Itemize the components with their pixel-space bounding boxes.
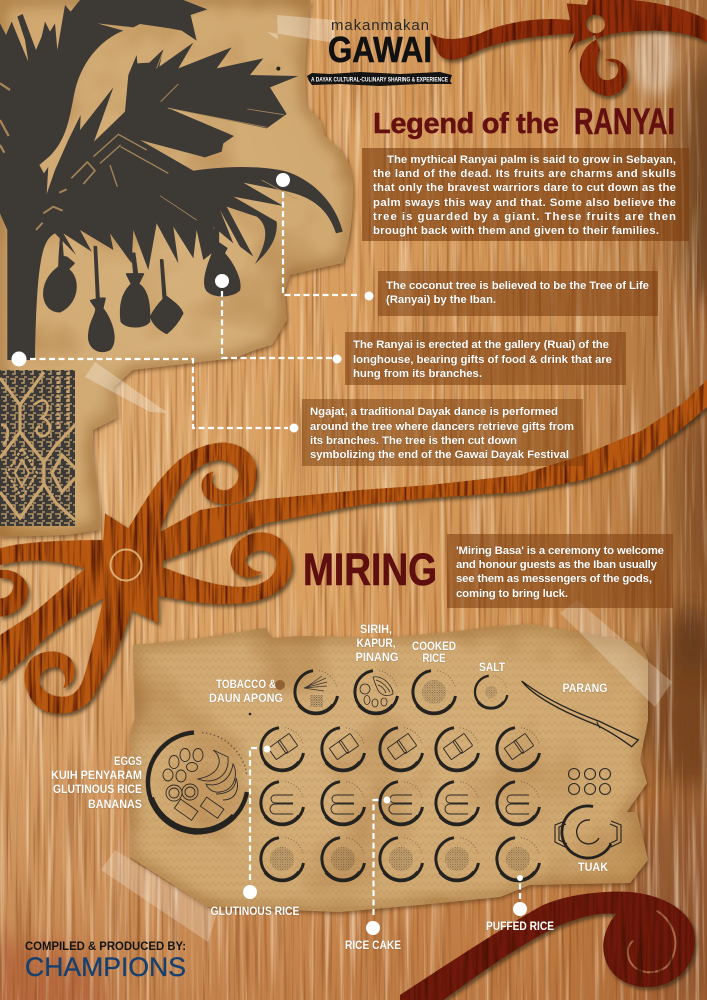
text panel: ranyai myth: brought back with them and given to their families. [373, 225, 659, 237]
parchment: miring offering layout [125, 620, 655, 920]
knot centre ring [110, 550, 142, 580]
ribbon: bottom right spiral [400, 892, 695, 1000]
ranyai palm silhouette [0, 0, 343, 360]
plate: sirih kapur pinang [355, 671, 398, 713]
label: puffed rice: PUFFED RICE [486, 921, 554, 933]
text panel: ngajat [302, 399, 583, 466]
label: offerings on large plate [51, 756, 142, 811]
text panel: ruai [345, 332, 626, 385]
plate: cooked rice [413, 671, 456, 713]
heading: legend of the ranyai [373, 101, 675, 142]
dashed callouts: miring [243, 746, 527, 935]
plates: glutinous rice row [261, 782, 540, 824]
tuak jar [555, 806, 621, 858]
large plate: eggs, kuih, glutinous rice, bananas [148, 732, 247, 832]
label: offerings on large plate: KUIH PENYARAM [51, 770, 142, 782]
label: cooked rice [412, 641, 456, 665]
text panel: ruai: The Ranyai is erected at the gallery (Ruai) of the [353, 339, 609, 351]
text panel: ranyai myth: The mythical Ranyai palm is said to grow in Sebayan, [387, 154, 676, 166]
text panel: ngajat: symbolizing the end of the Gawai Dayak Festival [310, 449, 569, 461]
logo: makanmakan gawai: makanmakan [331, 17, 429, 34]
label: tobacco and daun apong: TOBACCO & [216, 679, 276, 691]
text panel: ngajat: its branches. The tree is then cut down [310, 435, 517, 447]
label: parang: PARANG [562, 683, 608, 695]
ribbon: top right miring motif [430, 0, 707, 96]
label: sirih kapur pinang: PINANG [356, 652, 399, 664]
plate: tobacco and daun apong [295, 671, 338, 713]
parchment: top left [0, 0, 353, 537]
text panel: coconut tree: (Ranyai) by the Iban. [386, 294, 496, 306]
text panel: ranyai myth: that only the bravest warriors dare to cut down as the [373, 182, 676, 194]
heading: miring: MIRING [303, 544, 437, 595]
tape strips on miring parchment [101, 600, 672, 942]
hanging offering bags [44, 220, 240, 351]
text panel: coconut tree: The coconut tree is believed to be the Tree of Life [386, 280, 649, 292]
text panel: ranyai myth [362, 148, 689, 241]
label: sirih kapur pinang [356, 624, 399, 664]
text panel: ranyai myth: palm sways this way and that. Some also believe the [373, 197, 676, 209]
label: offerings on large plate: EGGS [114, 756, 142, 768]
ikat textile panel [0, 370, 75, 526]
label: tuak: TUAK [578, 862, 609, 874]
credit: compiled and produced by [25, 939, 186, 982]
text panel: coconut tree [378, 271, 658, 316]
heading: legend of the ranyai: Legend of the [373, 108, 559, 140]
label: tobacco and daun apong [209, 679, 283, 705]
text panel: miring basa [447, 534, 673, 608]
palm fronds and trunk [0, 0, 343, 360]
label: sirih kapur pinang: SIRIH, [360, 624, 392, 636]
plates: puffed rice row [261, 838, 540, 880]
text panel: ruai: hung from its branches. [353, 368, 482, 380]
parang knife [522, 681, 638, 747]
text panel: ranyai myth: the land of the dead. Its fruits are charms and skulls [373, 168, 676, 180]
logo: makanmakan gawai: GAWAI [328, 29, 432, 70]
text panel: miring basa: 'Miring Basa' is a ceremony to welcome [456, 545, 664, 557]
label: cooked rice: RICE [422, 653, 446, 665]
text panel: miring basa: coming to bring luck. [456, 588, 568, 600]
logo: makanmakan gawai: A DAYAK CULTURAL-CULINARY SHARING & EXPERIENCE [311, 76, 448, 84]
label: salt: SALT [479, 662, 505, 674]
logo: makanmakan gawai [307, 17, 452, 86]
label: offerings on large plate: BANANAS [88, 799, 142, 811]
plates: rice cake row [261, 728, 540, 770]
plate: salt [475, 676, 507, 708]
miring plates [261, 671, 540, 880]
text panel: ngajat: Ngajat, a traditional Dayak dance is performed [310, 406, 558, 418]
label: sirih kapur pinang: KAPUR, [356, 638, 396, 650]
tape strip on parchment corner [85, 362, 168, 413]
tape strip near logo [267, 15, 335, 43]
text panel: ngajat: around the tree where dancers retrieve gifts from [310, 421, 574, 433]
label: cooked rice: COOKED [412, 641, 456, 653]
text panel: ruai: longhouse, bearing gifts of food & drink that are [353, 354, 612, 366]
label: offerings on large plate: GLUTINOUS RICE [53, 784, 142, 796]
text panel: miring basa: see them as messengers of the gods, [456, 573, 652, 585]
label: glutinous rice: GLUTINOUS RICE [210, 906, 300, 918]
credit: compiled and produced by: CHAMPIONS [25, 952, 186, 982]
dashed callouts: ranyai [12, 173, 374, 432]
tuak cups [568, 768, 610, 794]
text panel: miring basa: and honour guests as the Iban usually [456, 559, 658, 571]
frond light slits [0, 51, 297, 230]
text panel: ranyai myth: tree is guarded by a giant. These fruits are then [373, 211, 676, 223]
ribbon: long central miring knot [0, 380, 707, 713]
label: rice cake: RICE CAKE [345, 940, 401, 952]
credit: compiled and produced by: COMPILED & PRODUCED BY: [25, 939, 186, 953]
label: tobacco and daun apong: DAUN APONG [209, 693, 283, 705]
